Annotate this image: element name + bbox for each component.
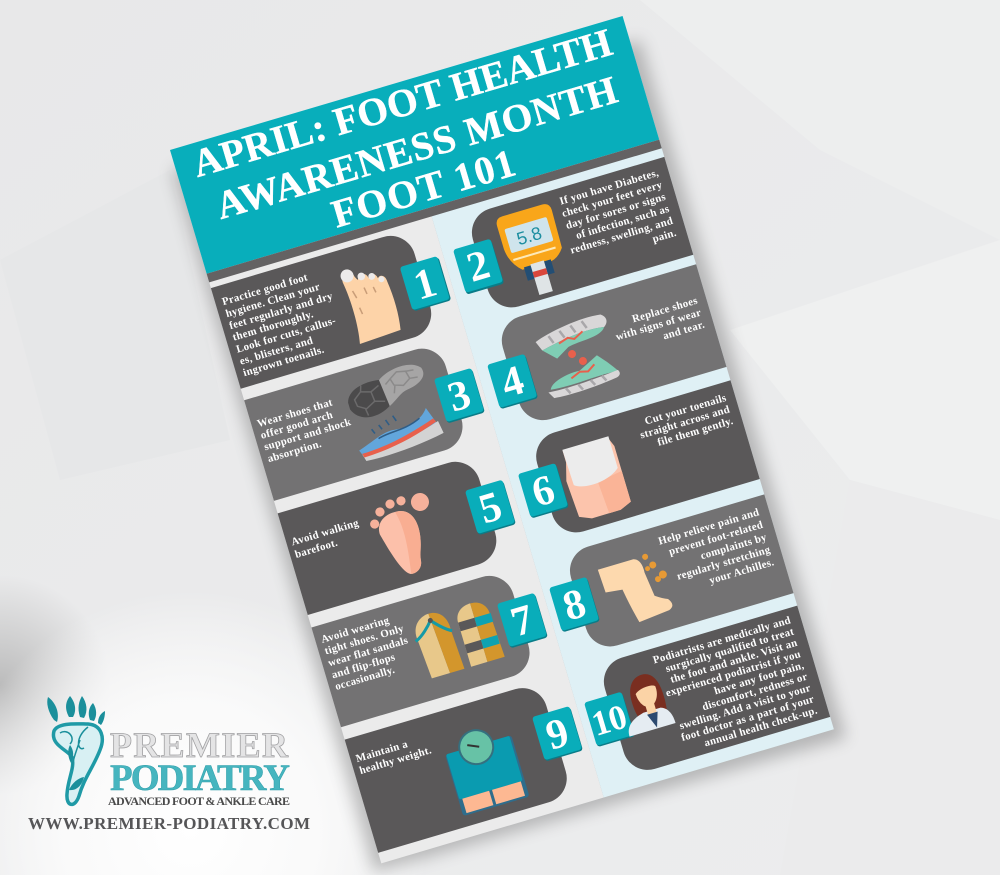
logo text: podiatry: PODIATRY <box>110 758 290 799</box>
logo icon: leaf foot <box>47 696 105 804</box>
text: wear shoes: absorption. <box>266 438 323 465</box>
text: diabetes: pain. <box>651 227 678 245</box>
panel 3: supportive shoes <box>244 343 469 501</box>
text: maintain healthy weight <box>354 732 433 777</box>
number 6 <box>518 463 569 519</box>
text: podiatrists: discomfort, redness or <box>701 671 809 713</box>
text: avoid tight shoes: wear flat sandals <box>327 634 410 669</box>
text: practice good foot hygiene: feet regularly and dry <box>228 290 335 332</box>
text: cut toenails: straight across and <box>639 403 731 441</box>
text: wear shoes <box>256 393 356 465</box>
number 2 <box>453 239 504 295</box>
text: avoid tight shoes: Avoid wearing <box>320 614 391 646</box>
text: practice good foot hygiene <box>221 266 348 379</box>
icon: foot with toes <box>338 259 403 344</box>
poster shadow <box>172 40 846 872</box>
panel 8: stretch achilles <box>564 494 794 653</box>
logo tagline: ADVANCED FOOT & ANKLE CARE <box>108 794 290 808</box>
title: APRIL: FOOT HEALTH <box>187 20 617 186</box>
text: practice good foot hygiene: ingrown toenails. <box>242 344 326 379</box>
number 7 <box>497 593 548 649</box>
text: stretching <box>657 506 776 597</box>
number 3: 3 <box>443 371 476 421</box>
text: podiatrists: the foot and ankle. Visit an <box>669 637 799 686</box>
text: diabetes: If you have Diabetes, <box>558 167 660 208</box>
poster base <box>170 16 834 863</box>
text: diabetes: check your feet every <box>561 179 664 220</box>
text: podiatrists: foot doctor as a part of your <box>680 693 816 744</box>
text: maintain healthy weight: healthy weight. <box>358 744 433 777</box>
icon: female doctor <box>614 669 676 737</box>
panel 5: avoid barefoot <box>278 456 502 615</box>
text: replace shoes: and tear. <box>662 319 706 342</box>
text: stretching: your Achilles. <box>708 556 776 587</box>
icon: blue running shoe <box>352 403 445 463</box>
text: podiatrists <box>652 614 819 757</box>
number 4: 4 <box>496 357 529 407</box>
text: stretching: complaints by <box>699 531 768 562</box>
number 9 <box>532 706 583 762</box>
icon: toenail <box>558 435 632 522</box>
website url: WWW.PREMIER-PODIATRY.COM <box>28 814 310 833</box>
text: podiatrists: surgically qualified to treat <box>664 626 796 675</box>
text: podiatrists: swelling. Add a visit to your <box>678 682 812 732</box>
text: podiatrists: have any foot pain, <box>713 659 806 697</box>
text: stretching: regularly stretching <box>675 544 772 583</box>
icon: shoe sole <box>342 361 431 422</box>
icon: footprint <box>365 489 448 581</box>
number 5: 5 <box>474 483 507 533</box>
text: diabetes <box>555 167 678 269</box>
text: avoid tight shoes <box>320 611 417 693</box>
title: AWARENESS MONTH <box>211 68 622 228</box>
text: maintain healthy weight: Maintain a <box>354 738 410 765</box>
logo <box>28 696 310 833</box>
number 8: 8 <box>558 580 591 630</box>
text: practice good foot hygiene: them thoroughly. <box>231 308 315 344</box>
header band <box>170 16 662 282</box>
text: replace shoes: with signs of wear <box>614 307 703 343</box>
icon: worn shoes <box>531 312 624 400</box>
number 9: 9 <box>541 709 574 760</box>
text: practice good foot hygiene: Look for cuts, callus- <box>235 315 338 356</box>
icon: bathroom scale <box>440 719 529 816</box>
poster <box>170 15 834 863</box>
panel 9: healthy weight <box>345 682 573 853</box>
panel 7: flip-flops <box>311 570 536 727</box>
text: podiatrists: Podiatrists are medically and <box>652 614 792 667</box>
text: practice good foot hygiene: es, blisters, and <box>238 335 315 368</box>
text: avoid tight shoes: tight shoes. Only <box>323 622 406 657</box>
number 8 <box>549 577 600 633</box>
number 1: 1 <box>409 260 442 310</box>
number 3 <box>434 368 485 424</box>
panel 6: cut toenails <box>530 380 760 538</box>
text: avoid tight shoes: and flip-flops <box>330 651 397 681</box>
number 6: 6 <box>527 466 560 517</box>
panel 2: diabetes <box>466 157 693 313</box>
text: wear shoes: Wear shoes that <box>256 396 334 430</box>
number 7: 7 <box>506 596 539 646</box>
number 5 <box>465 480 516 536</box>
number 1 <box>400 256 451 312</box>
text: avoid walking barefoot <box>290 517 364 561</box>
title: FOOT 101 <box>327 141 520 237</box>
text: avoid walking barefoot: Avoid walking <box>290 517 361 548</box>
text: practice good foot hygiene: Practice good foot <box>221 271 309 308</box>
text: stretching: Help relieve pain and <box>657 506 761 548</box>
number 2: 2 <box>462 242 495 292</box>
text: diabetes: day for sores or signs <box>564 191 667 232</box>
number 4 <box>487 354 538 410</box>
text: avoid tight shoes: occasionally. <box>334 664 396 693</box>
text: diabetes: redness, swelling, and <box>569 215 674 257</box>
panel 1: hygiene <box>211 230 437 389</box>
text: cut toenails: file them gently. <box>656 415 735 449</box>
text: replace shoes: Replace shoes <box>631 295 699 325</box>
text: wear shoes: offer good arch <box>259 409 334 442</box>
icon: leg with achilles pain <box>597 549 678 629</box>
text: diabetes: of infection, such as <box>575 203 671 242</box>
text: replace shoes <box>611 295 706 355</box>
panel 10: podiatrists <box>598 606 830 776</box>
logo text: premier: PREMIER <box>110 725 289 765</box>
text: cut toenails: Cut your toenails <box>643 392 728 428</box>
text: wear shoes: support and shock <box>263 416 353 453</box>
icon: glucose meter: 5.8 <box>514 223 544 249</box>
number 10: 10 <box>587 697 631 744</box>
icon: flip-flops <box>409 596 505 680</box>
icon: glucose meter <box>495 202 574 301</box>
text: podiatrists: annual health check-up. <box>703 704 819 749</box>
text: avoid walking barefoot: barefoot. <box>294 537 339 561</box>
panel 4: replace shoes <box>496 264 727 426</box>
title <box>187 20 642 270</box>
text: stretching: prevent foot-related <box>667 519 764 558</box>
text: podiatrists: experienced podiatrist if you <box>664 648 802 700</box>
text: cut toenails <box>635 392 735 453</box>
text: practice good foot hygiene: hygiene. Clean your <box>224 281 321 320</box>
